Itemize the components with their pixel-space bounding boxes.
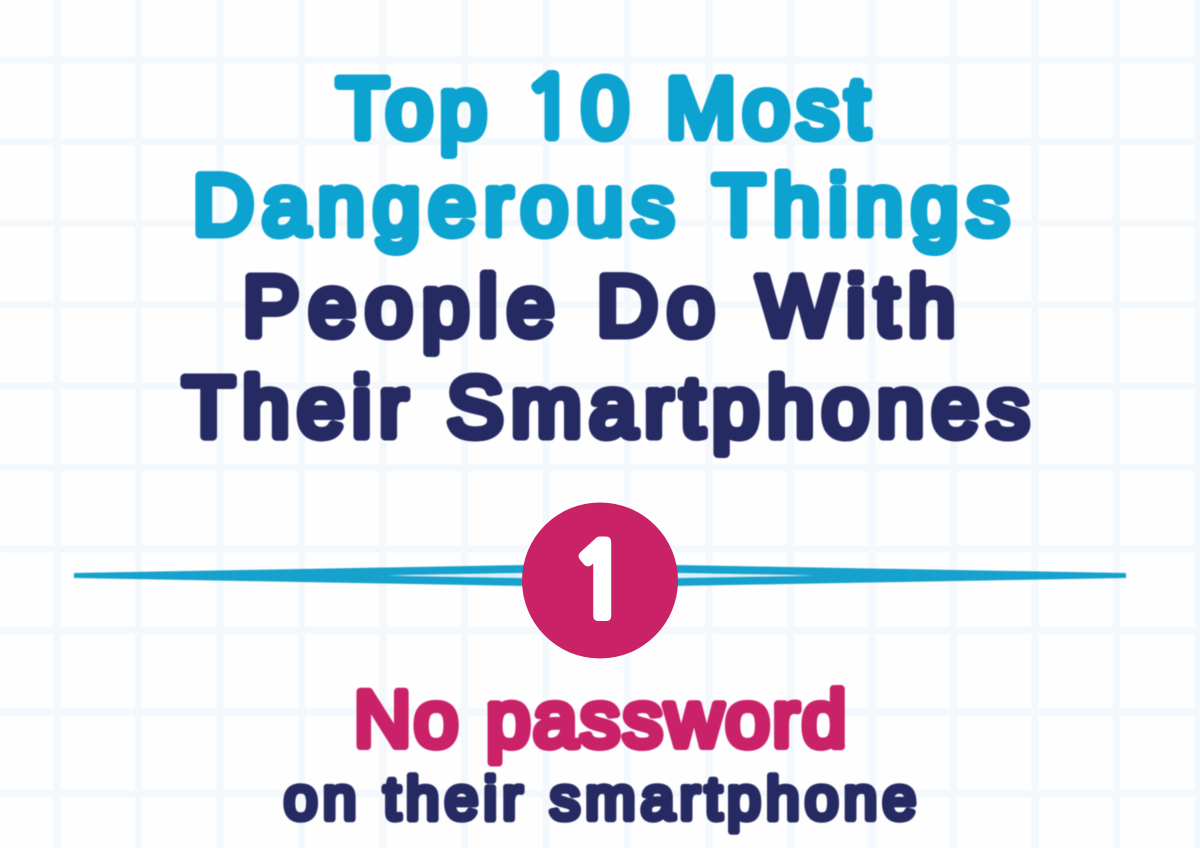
item heading: No password [354, 674, 846, 763]
title line: Dangerous Things: Dangerous Things [193, 158, 1009, 252]
number badge [522, 502, 678, 658]
title line: People Do With: People Do With [243, 259, 955, 353]
title line: Their Smartphones: Their Smartphones [183, 360, 1029, 454]
badge numeral: 1 [569, 532, 631, 633]
title line: Top 10 Most: Top 10 Most [337, 61, 869, 155]
divider line [74, 565, 1126, 586]
item subheading: on their smartphone [284, 765, 916, 832]
title [183, 61, 1029, 454]
